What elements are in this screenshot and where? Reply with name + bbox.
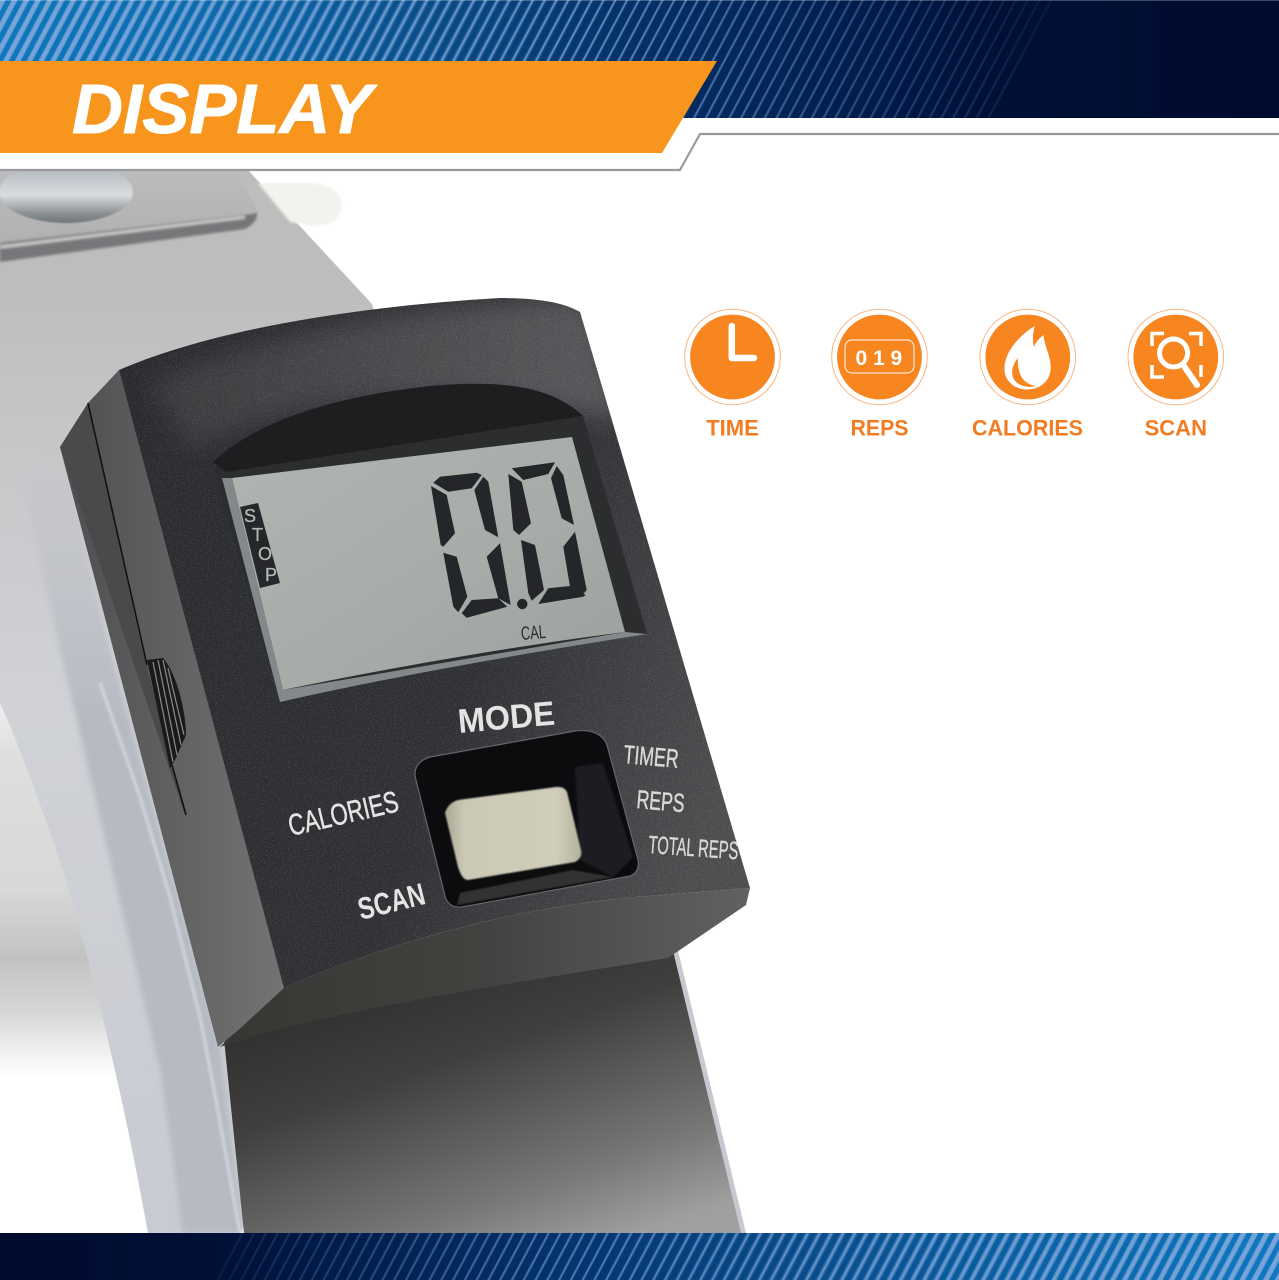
frame arm bevel [44,558,244,1233]
icon: time [685,309,780,405]
bolt head [0,172,134,224]
icon: reps counter [832,309,927,405]
label: reps: REPS [850,416,908,440]
blurred background behind arm [0,704,113,1062]
screen bezel [213,416,647,700]
side ribbed grip [147,658,186,768]
housing top light band [150,300,620,450]
display housing [60,298,750,1047]
header band: blue striped [0,0,1279,118]
CAL label: CAL [520,622,547,645]
mode switch slot [415,731,638,907]
mode switch slider [445,787,581,880]
plate rim [0,213,257,262]
screen top hood [213,384,583,472]
orange title banner [0,61,717,153]
LCD ledge [222,478,647,702]
STOP indicator: STOP [244,506,277,585]
icon: calories flame [980,309,1076,405]
slot right shelf [575,763,633,877]
total reps label: TOTAL REPS [648,831,739,865]
side dark strip [60,403,185,815]
label: time: TIME [706,416,759,440]
decimal point [517,599,528,609]
housing front face [119,298,750,988]
white nub [258,183,342,226]
header divider line [0,134,1279,170]
housing side face [60,370,287,1047]
scan label: SCAN [354,876,429,927]
metal plate [0,216,212,244]
rear dark panel [222,930,745,1233]
mode label: MODE [456,695,556,741]
slot bottom shelf [457,870,613,905]
LCD screen [232,437,625,690]
housing speckle [119,298,750,988]
grey frame arm [0,171,377,1233]
frame highlight [100,683,240,1233]
icon: scan magnifier [1128,309,1224,405]
footer band: blue striped [0,1233,1279,1280]
housing lower lip [220,888,750,1047]
label: calories: CALORIES [972,416,1083,440]
digit 0 first [431,473,511,618]
rear panel light edge [674,951,746,1233]
photo: rowing machine display unit [0,161,750,1233]
label: scan: SCAN [1145,416,1207,440]
icon: reps counter: 019 [856,347,902,370]
title: DISPLAY [72,70,377,148]
timer label: TIMER [622,739,680,774]
side seam [88,403,186,815]
calories label: CALORIES [285,785,402,843]
reps label: REPS [635,784,686,818]
digit 0 second [508,462,587,604]
